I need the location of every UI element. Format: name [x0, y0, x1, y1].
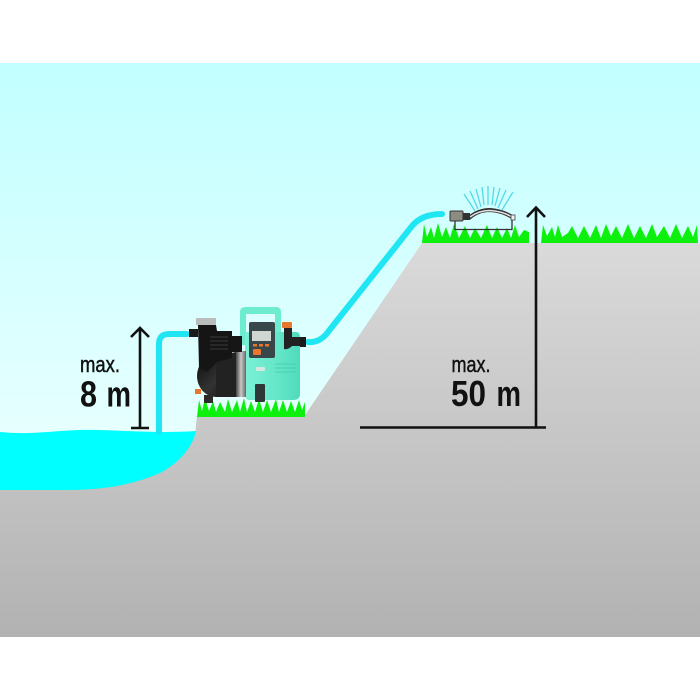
display screen [252, 331, 271, 341]
grass under pump [197, 398, 305, 417]
intake hose [159, 334, 187, 432]
inlet connector [189, 329, 198, 337]
housing vents [275, 364, 296, 372]
label: max. 50 m: m [496, 373, 521, 414]
label: max. 50 m [451, 352, 521, 414]
sprinkler base frame [455, 218, 512, 230]
steel flange [236, 351, 246, 397]
panel buttons [253, 344, 269, 355]
prefilter lid [196, 318, 216, 325]
pump volute [197, 355, 235, 397]
outlet orange cap [282, 322, 292, 328]
arrow: 8 m suction height [131, 328, 149, 428]
teal housing [245, 332, 300, 400]
label: max. 50 m: 50 [451, 373, 486, 414]
label: max. 8 m: 8 [80, 374, 97, 414]
teal handle [240, 307, 281, 345]
label: max. 8 m [80, 352, 131, 414]
sprinkler arm [469, 210, 512, 218]
spray jets [464, 186, 513, 211]
prefilter body [198, 325, 232, 372]
drain plug [195, 389, 201, 394]
black foot [255, 384, 265, 402]
sprinkler connector [450, 211, 463, 221]
water pond [0, 430, 196, 490]
outlet hose [308, 214, 442, 342]
label: max. 50 m: max. [452, 352, 490, 377]
label: max. 8 m: m [106, 374, 131, 414]
black motor connector [230, 336, 242, 352]
housing badge [256, 367, 265, 371]
arrow: 50 m delivery height [360, 208, 546, 428]
grass left of sprinkler [422, 223, 529, 243]
outlet connector [300, 337, 306, 347]
pump [189, 307, 306, 403]
prefilter ribs [210, 337, 228, 349]
ground hill [0, 243, 700, 637]
outlet fitting [284, 328, 300, 349]
sky background [0, 63, 700, 493]
label: max. 8 m: max. [80, 352, 120, 377]
sprinkler [450, 186, 515, 230]
grass right of arrow [541, 224, 698, 243]
control panel [249, 322, 275, 358]
